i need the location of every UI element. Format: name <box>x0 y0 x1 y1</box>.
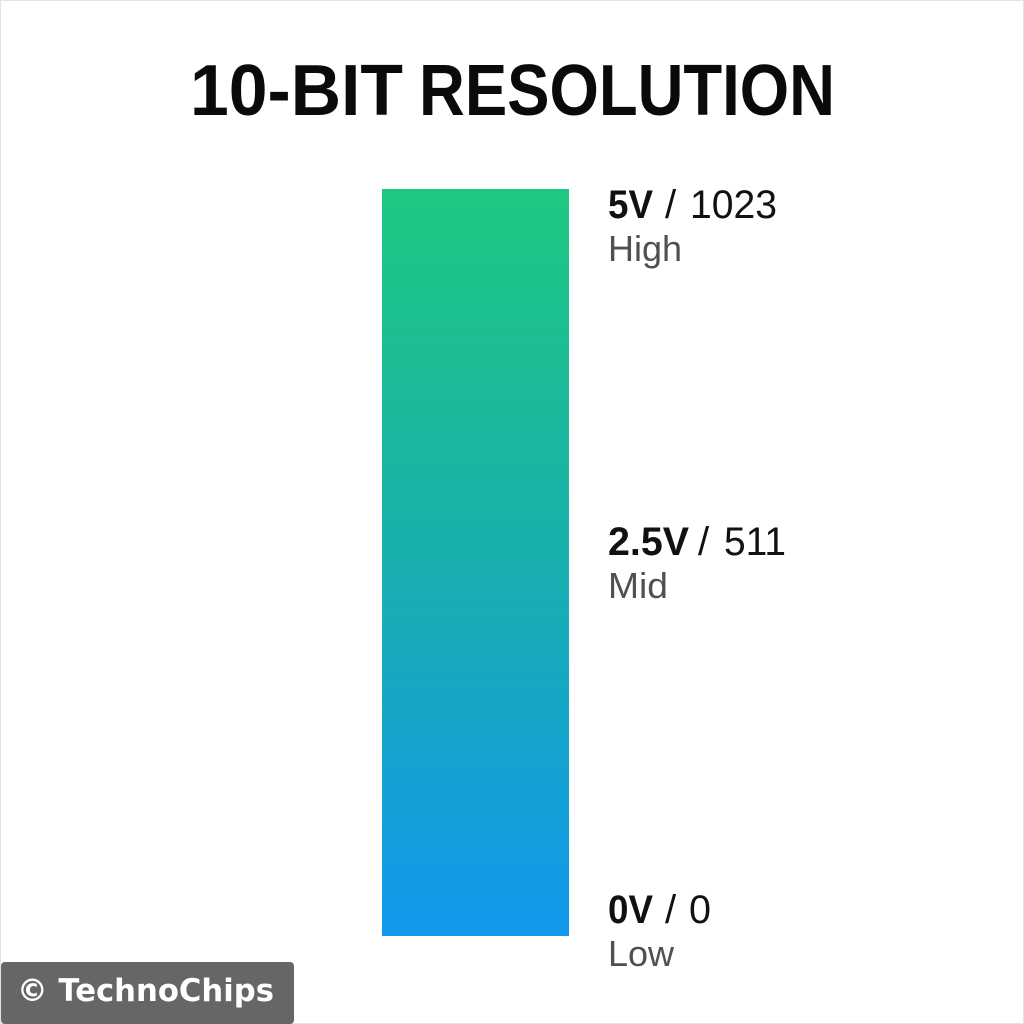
label: mid <box>608 520 786 606</box>
label: mid: / <box>698 520 710 564</box>
label: high: 5V <box>608 183 653 227</box>
watermark badge: © TechnoChips <box>17 973 274 1009</box>
label: low <box>608 888 711 974</box>
label: high: 1023 <box>690 183 777 227</box>
gradient voltage bar <box>382 189 569 936</box>
watermark badge <box>1 962 294 1024</box>
label: high <box>608 183 777 269</box>
label: mid: Mid <box>608 565 668 606</box>
label: high: High <box>608 228 682 269</box>
label: high: / <box>665 183 677 227</box>
label: low: / <box>665 888 677 932</box>
label: mid: 511 <box>724 520 786 564</box>
label: low: 0V <box>608 888 653 932</box>
label: mid: 2.5V <box>608 520 689 564</box>
title: RESOLUTION <box>419 51 835 131</box>
label: low: 0 <box>689 888 711 932</box>
label: low: Low <box>608 933 675 974</box>
title <box>190 51 835 131</box>
title: 10-BIT <box>190 51 403 131</box>
